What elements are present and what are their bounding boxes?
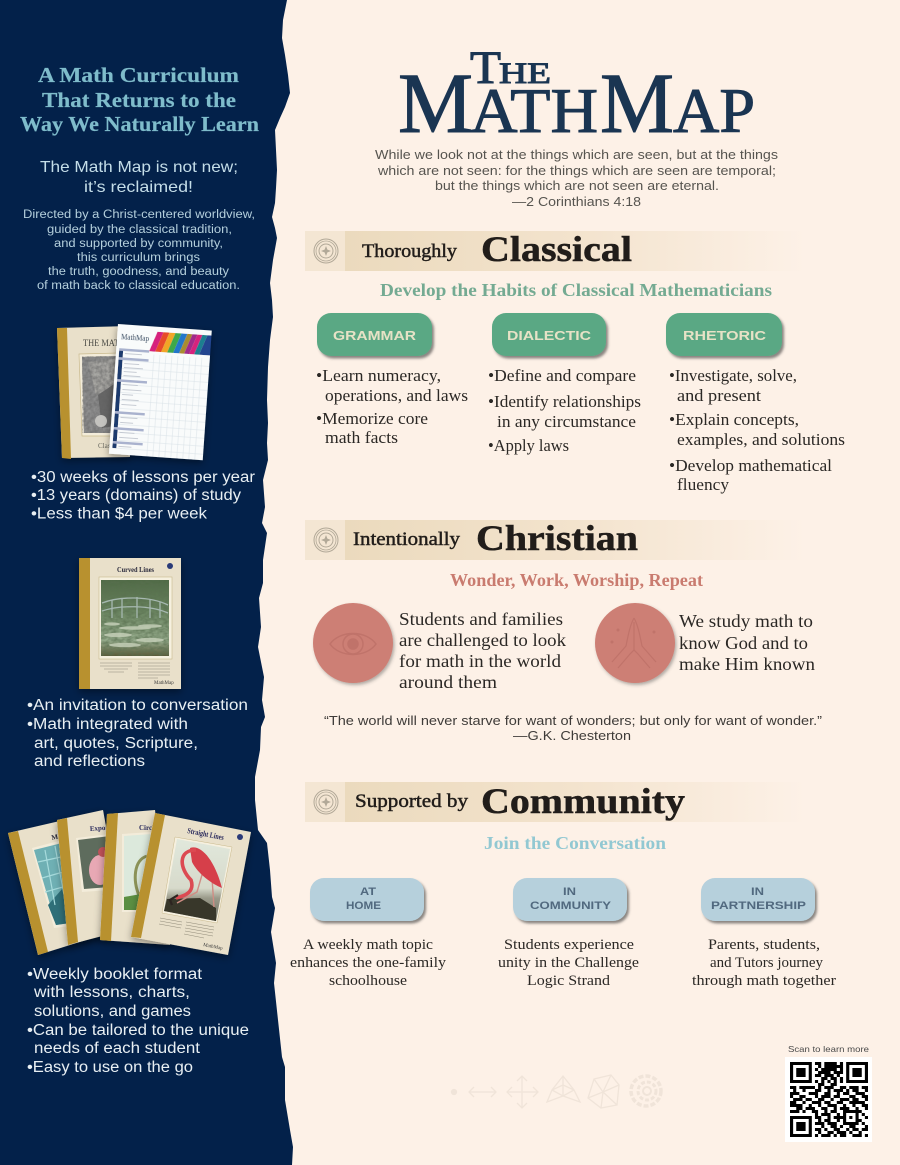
list: rhetoric: •Develop mathematical [669,456,832,475]
QR code block [785,1044,872,1142]
title: M [600,55,674,151]
icon: compass seal [314,528,338,552]
sidebar list: format: •Weekly booklet format [27,966,203,983]
text: look for math: for math in the world [399,651,561,671]
text: in community: Students experience [504,937,634,953]
text: know God [679,611,815,674]
image: book and chart [57,324,212,460]
list: rhetoric [669,366,845,494]
image: book and chart: THE MAT [83,339,119,349]
title: HE [499,57,551,90]
sidebar heading: Way We Naturally Learn [20,112,259,136]
sidebar intro text: guided by the classical tradition, [47,224,232,236]
text: look for math: are challenged to look [399,630,566,650]
sidebar list: format [27,966,249,1076]
sidebar list: conversation: art, quotes, Scripture, [34,735,198,752]
title: T [470,42,501,94]
list: rhetoric: and present [677,386,761,405]
image: fan of weekly booklets: Straight Lines [187,826,225,842]
list: dialectic: •Identify relationships [488,392,641,411]
sidebar list: format: with lessons, charts, [33,984,190,1001]
section banner: Supported by Community: Supported by [355,792,469,812]
quote: Chesterton: —G.K. Chesterton [513,728,631,743]
list: grammar: math facts [325,428,398,447]
subheading: habits: Develop the Habits of Classical Mathematicians [380,280,772,300]
text: at home: schoolhouse [329,973,407,989]
scripture verse: While we look not at the things which are seen, but at the things [375,147,779,162]
text: in community: Logic Strand [527,973,611,989]
scripture verse [375,147,779,209]
list: dialectic [488,366,641,455]
image: fan of weekly booklets: MathMap [203,943,223,952]
list: rhetoric: •Explain concepts, [669,410,799,429]
list: dialectic: •Define and compare [488,366,636,385]
text: in partnership: Parents, students, [708,937,820,953]
sidebar list: conversation [27,697,248,770]
scripture verse: —2 Corinthians 4:18 [512,194,641,209]
text: know God: make Him known [679,654,815,674]
image: fan of weekly booklets: Expon [90,824,110,833]
sidebar list: format: •Can be tailored to the unique [27,1022,249,1039]
quote: Chesterton: “The world will never starve for want of wonders; but only for want of wonder.” [324,713,822,728]
text: look for math [399,609,566,692]
sidebar intro text: the truth, goodness, and beauty [48,266,229,278]
scripture verse: which are not seen: for the things which are seen are temporal; [377,163,776,178]
sidebar heading [20,63,259,136]
sidebar intro text: this curriculum brings [77,252,200,264]
sidebar list: format: solutions, and games [34,1003,191,1020]
section banner: Intentionally Christian [305,518,805,560]
image: fan of weekly booklets: Circl [139,824,154,832]
list: grammar: operations, and laws [325,386,468,405]
text: look for math: Students and families [399,609,563,629]
text: at home [290,937,447,989]
pill: rhetoric [666,313,782,356]
quote: Chesterton [324,713,822,743]
section banner: Intentionally Christian: Intentionally [353,530,461,550]
QR code block: Scan to learn more [788,1044,869,1054]
text: know God: know God and to [679,633,808,653]
text: in partnership [692,937,836,989]
sidebar tagline [40,159,238,196]
image: fan of weekly booklets [8,810,251,955]
sidebar list: conversation: •An invitation to conversation [27,697,248,714]
sidebar intro text: Directed by a Christ-centered worldview, [23,209,255,221]
panel: navy sidebar with torn edge [0,0,293,1165]
list: grammar: •Memorize core [316,409,428,428]
icon: praying hands in circle [595,603,675,683]
text: know God: We study math to [679,611,813,631]
sidebar list: format: •Easy to use on the go [27,1059,193,1076]
pill: dialectic [492,313,606,356]
text: at home: A weekly math topic [303,937,433,953]
image: Curved Lines booklet: MathMap [154,681,174,686]
pill: in partnership: PARTNERSHIP [711,900,806,912]
pill: at home [310,878,424,921]
section banner: Intentionally Christian: Christian [476,518,638,558]
list: rhetoric: •Investigate, solve, [669,366,797,385]
list: grammar [316,366,468,447]
text: in community [498,937,639,989]
section banner: Thoroughly Classical: Thoroughly [362,242,458,262]
pill: dialectic: DIALECTIC [507,328,592,343]
list: rhetoric: examples, and solutions [677,430,845,449]
section banner: Thoroughly Classical: Classical [481,229,632,269]
icons: dimension progression [452,1075,661,1108]
subheading: join: Join the Conversation [484,833,666,853]
section banner: Supported by Community: Community [481,781,685,821]
sidebar list: curriculum facts: •30 weeks of lessons per year [31,469,255,486]
text: in partnership: and Tutors journey [710,955,823,971]
section banner: Supported by Community [305,781,805,822]
title: M [398,55,473,151]
pill: grammar [317,313,432,356]
section banner: Thoroughly Classical [305,229,805,271]
sidebar heading: That Returns to the [42,88,236,112]
sidebar list: curriculum facts [31,469,255,522]
pill: in partnership [701,878,815,921]
image: Curved Lines booklet: Curved Lines [117,565,154,574]
pill: in community [513,878,627,921]
title: ATH [470,75,598,146]
icon: compass seal [314,239,338,263]
pill: in partnership: IN [751,886,764,898]
list: dialectic: •Apply laws [488,436,569,455]
list: grammar: •Learn numeracy, [316,366,441,385]
subheading: wonder: Wonder, Work, Worship, Repeat [450,570,703,590]
list: dialectic: in any circumstance [497,412,636,431]
sidebar heading: A Math Curriculum [38,63,240,87]
list: rhetoric: fluency [677,475,730,494]
sidebar tagline: The Math Map is not new; [40,159,238,176]
icon: eye in circle [313,603,393,683]
image: Curved Lines booklet [79,558,181,689]
icon: compass seal [314,790,338,814]
image: book and chart: Classical [98,442,123,450]
pill: at home: HOME [346,900,381,912]
pill: in community: IN [563,886,576,898]
text: at home: enhances the one-family [290,955,447,971]
text: look for math: around them [399,672,497,692]
sidebar list: curriculum facts: •13 years (domains) of study [31,487,241,504]
title [398,42,755,151]
image: book and chart: MathMap [121,332,149,343]
sidebar intro text: of math back to classical education. [37,280,240,292]
sidebar list: conversation: •Math integrated with [27,716,188,733]
sidebar intro text: and supported by community, [54,238,223,250]
sidebar tagline: it’s reclaimed! [84,179,193,196]
text: in partnership: through math together [692,973,836,989]
pill: at home: AT [360,886,376,898]
pill: in community: COMMUNITY [530,900,612,912]
scripture verse: but the things which are not seen are eternal. [435,178,719,193]
pill: grammar: GRAMMAR [333,328,417,343]
pill: rhetoric: RHETORIC [683,328,767,343]
image: fan of weekly booklets: M [51,833,59,842]
sidebar list: format: needs of each student [34,1040,201,1057]
title: AP [673,75,755,146]
sidebar list: conversation: and reflections [34,753,145,770]
sidebar list: curriculum facts: •Less than $4 per week [31,506,207,522]
sidebar intro text [23,209,255,292]
text: in community: unity in the Challenge [498,955,639,971]
